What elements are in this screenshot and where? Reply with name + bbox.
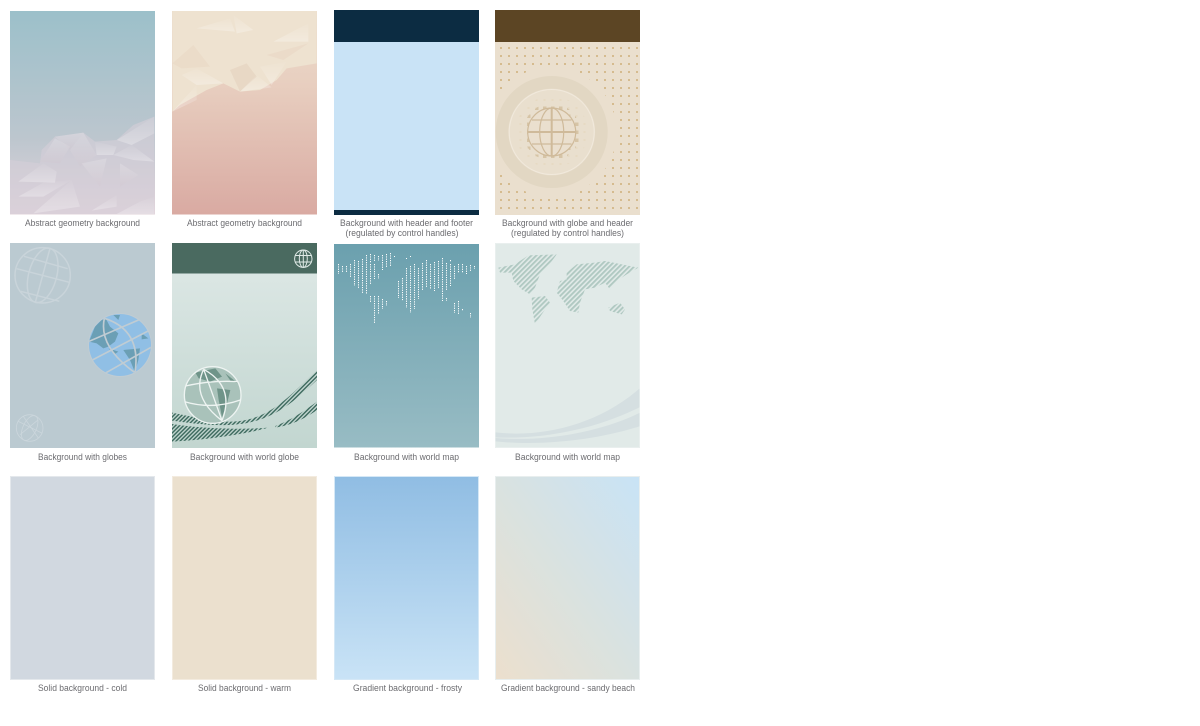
polygon facets: cream top [172, 11, 317, 112]
icon: header globe [295, 250, 312, 267]
panel: background with header and footer [334, 10, 479, 215]
icon: small pale globe [16, 413, 43, 443]
icon: large pale globe [15, 245, 70, 306]
panel: solid background, cold [10, 476, 154, 680]
panel: background with globes [10, 243, 155, 448]
footer bar [334, 210, 479, 215]
caption: globe and header: Background with globe and header [502, 218, 633, 228]
header bar [495, 10, 640, 42]
panel: background with world globe [172, 243, 317, 448]
swoosh bands [496, 389, 639, 443]
panel: background with world map, dotted [334, 244, 479, 448]
swoosh stripes [172, 370, 317, 442]
header bar [172, 243, 317, 274]
icon: world globe [184, 367, 241, 423]
globe outer ring [502, 82, 601, 182]
icon: blue earth globe [88, 313, 152, 377]
panel: background with world map, striped [496, 244, 640, 448]
panel: solid background, warm [172, 476, 316, 680]
icon: globe [528, 108, 576, 156]
world map stripes [498, 254, 638, 324]
caption: header and footer [340, 218, 473, 238]
header bar [334, 10, 479, 42]
caption: solid cold: Solid background - cold [38, 683, 127, 693]
caption: abstract geometry 1: Abstract geometry background [25, 218, 140, 228]
caption: gradient frosty: Gradient background - frosty [353, 683, 462, 693]
caption: header and footer: (regulated by control handles) [346, 228, 458, 238]
panel: background with globe and header [487, 10, 640, 215]
caption: globe and header [502, 218, 633, 238]
caption: gradient sandy beach: Gradient background - sandy beach [501, 683, 635, 693]
world map dots [338, 253, 474, 323]
panel: gradient background, sandy beach [496, 476, 640, 680]
caption: solid warm: Solid background - warm [198, 683, 291, 693]
panel: gradient background, frosty [334, 476, 478, 680]
caption: header and footer: Background with header and footer [340, 218, 473, 228]
panel: abstract geometry background, teal [10, 11, 155, 214]
caption: abstract geometry 2: Abstract geometry background [187, 218, 302, 228]
polygon facets: lower mountains [10, 117, 154, 214]
caption: globes: Background with globes [38, 452, 127, 462]
caption: world globe: Background with world globe [190, 452, 299, 462]
caption: globe and header: (regulated by control handles) [511, 228, 624, 238]
caption: world map 1: Background with world map [354, 452, 459, 462]
panel: abstract geometry background, rose [172, 11, 317, 214]
caption: world map 2: Background with world map [515, 452, 620, 462]
